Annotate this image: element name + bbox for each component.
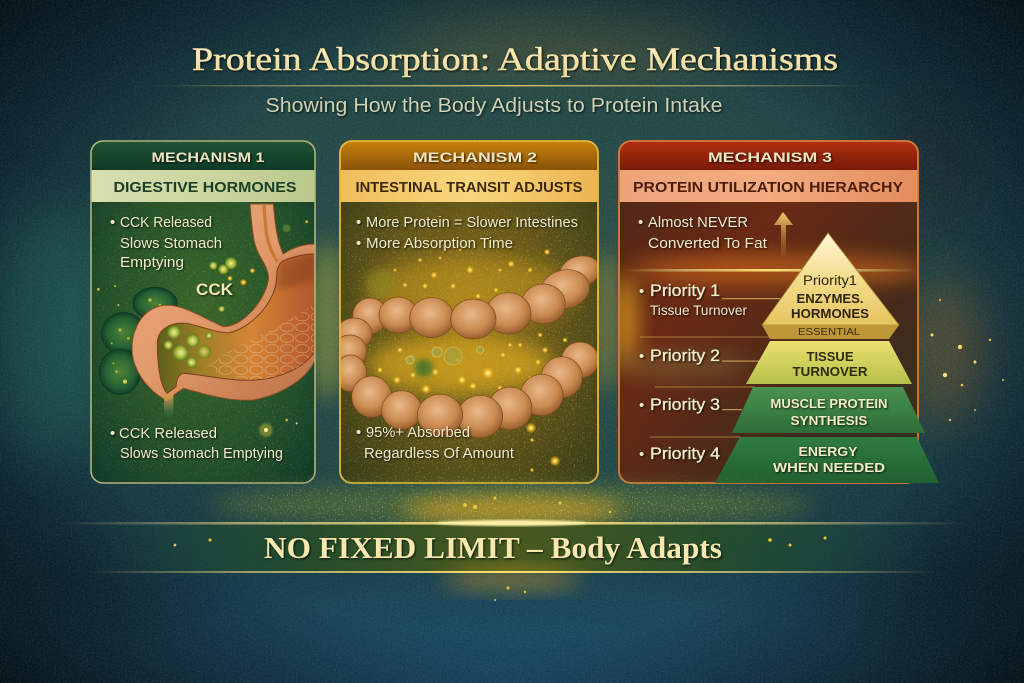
banner text: NO FIXED LIMIT – Body Adapts [264,530,722,565]
text block: bottom bullet [110,425,283,462]
panel: mechanism 3 [610,141,939,483]
pyramid tier 2: TURNOVER [792,365,868,379]
text block: top bullet: Slows Stomach [120,235,222,252]
pyramid tier 2: TISSUE [806,350,854,364]
heading: protein utilization hierarchy: PROTEIN UTILIZATION HIERARCHY [633,179,903,196]
icon: up arrow [774,212,793,256]
text block: priority 3: Priority 3 [650,396,720,414]
text block: top bullet: Emptying [120,254,184,271]
header: mechanism 2 [340,141,598,170]
text block: bottom bullet: 95%+ Absorbed [366,424,470,441]
panel 2 border [340,141,598,483]
panel 1 border [91,141,315,483]
label: mechanism 2: MECHANISM 2 [413,149,537,165]
pyramid tier 1: ENZYMES. [796,292,864,306]
label: mechanism 1: MECHANISM 1 [152,149,265,165]
header: mechanism 1 [91,141,315,170]
band: digestive hormones [91,170,315,202]
text block: top bullets: More Protein = Slower Intestines [366,214,578,231]
pyramid tier 1: ESSENTIAL [798,326,860,338]
pyramid tier 4: WHEN NEEDED [773,461,885,475]
text block: priority 1 [639,282,747,318]
bubbles [406,346,484,365]
text block: bottom bullet: Regardless Of Amount [364,445,515,462]
text block: priority 2: • [639,348,644,365]
pyramid tier 4 [715,437,939,483]
text block: never converted: • [638,214,643,231]
banner: no fixed limit [60,481,964,601]
pyramid tier 1: Priority1 [803,272,857,288]
chart: priority pyramid [715,233,939,483]
text block: bottom bullet: CCK Released [119,425,217,442]
icon: stomach illustration [97,204,315,437]
text block: never converted: Converted To Fat [648,235,768,252]
text block: priority 1: Priority 1 [650,282,720,300]
pyramid tier 3 [732,387,925,433]
text block: top bullet: • [110,214,115,231]
text block: top bullets [356,214,578,252]
header: mechanism 3 [619,141,918,170]
text block: priority 2: Priority 2 [650,347,720,365]
title: Protein Absorption: Adaptive Mechanisms [192,42,838,78]
text block: never converted [638,214,768,252]
text block: priority 1: • [639,283,644,300]
text block: top bullets: • [356,214,361,231]
text block: bottom bullet: • [356,424,361,441]
panel: mechanism 2 [333,141,604,483]
text block: top bullet: CCK Released [120,214,212,231]
title rule [150,85,870,86]
particles: golden sparkles [377,248,568,472]
text block: priority 1: Tissue Turnover [650,303,747,318]
text block: top bullets: More Absorption Time [366,235,513,252]
pyramid tier 1 [762,233,899,339]
icon: intestine segments [333,252,604,438]
pyramid tier 4: ENERGY [798,445,858,459]
pyramid tier 3: SYNTHESIS [790,414,868,428]
text block: priority 4: • [639,446,644,463]
text block: priority 3: • [639,397,644,414]
heading: digestive hormones: DIGESTIVE HORMONES [114,179,296,196]
pyramid tier 2 [746,341,912,384]
panel 3 border [619,141,918,483]
band: intestinal transit [340,170,598,202]
panel: mechanism 1 [91,141,315,483]
text block: bottom bullet [356,424,515,462]
text block: never converted: Almost NEVER [648,214,748,231]
label: CCK: CCK [196,280,234,299]
pyramid tier 3: MUSCLE PROTEIN [770,397,888,411]
text block: bottom bullet: Slows Stomach Emptying [120,445,283,462]
text block: top bullets: • [356,235,361,252]
text block: top bullet [110,214,222,271]
text block: priority 4: Priority 4 [650,445,720,463]
heading: intestinal transit adjusts: INTESTINAL TRANSIT ADJUSTS [356,179,582,196]
band: protein utilization [619,170,918,202]
text block: bottom bullet: • [110,425,115,442]
pyramid tier 1: HORMONES [791,307,869,321]
label: mechanism 3: MECHANISM 3 [708,149,832,165]
subtitle: Showing How the Body Adjusts to Protein Intake [266,95,722,117]
